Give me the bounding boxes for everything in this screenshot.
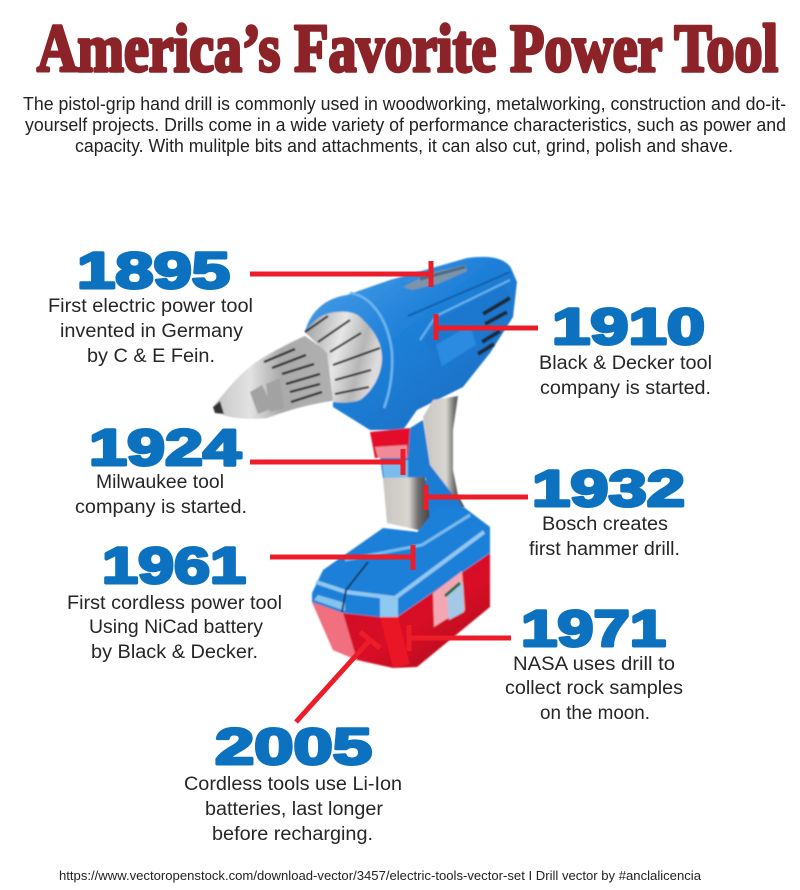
intro text: capacity. With mulitple bits and attachments, it can also cut, grind, polish and shave. [75,135,733,156]
callout: 2005: before recharging. [212,824,373,845]
callout: 1910 [539,298,712,399]
callout: 1895: invented in Germany [60,321,244,342]
callout: 1971: NASA uses drill to [513,654,675,675]
callout: 1932 [529,460,685,560]
callout: 1961 [67,537,282,663]
callout: 1895 [48,242,253,367]
callout: 1971: on the moon. [540,703,650,724]
callout: 1932: Bosch creates [542,514,668,535]
trigger [370,428,410,458]
callout: 1971: collect rock samples [505,678,683,699]
intro text: The pistol-grip hand drill is commonly used in woodworking, metalworking, construction and do-it- [23,93,786,114]
callout: 1961: by Black & Decker. [91,642,258,663]
callout: 1895: First electric power tool [48,296,253,317]
callout: 1932: 1932 [532,460,685,517]
collar highlight [350,293,392,408]
arrow: 1910 pointer [436,314,538,340]
blue drill housing [305,257,517,430]
callout: 1910: Black & Decker tool [539,353,712,374]
battery red base [312,553,490,668]
blue neck [380,420,490,545]
callout: 2005: batteries, last longer [205,799,384,820]
callout: 1924: company is started. [75,497,247,518]
metal cone [305,312,382,403]
callout: 1910: 1910 [552,298,705,355]
callout: 1924 [75,419,247,518]
arrow: 1932 pointer [426,485,528,510]
arrow: 1961 pointer [270,545,413,570]
battery highlights [316,532,484,598]
callout: 1961: First cordless power tool [67,593,282,614]
chuck nut detail [250,378,284,414]
arrow: 1971 pointer [409,625,511,651]
battery gauge [433,571,465,627]
arrow: 2005 pointer [296,632,380,722]
arrow: 1924 pointer [250,449,403,475]
arrow: 1895 pointer [250,261,431,287]
battery pink left face [312,602,357,660]
callout: 2005: 2005 [215,718,372,775]
cone grooves [305,316,380,394]
callout: 2005: Cordless tools use Li-Ion [184,774,402,795]
rear grip [423,396,465,508]
intro text: yourself projects. Drills come in a wide variety of performance characteristics, such as power and [25,114,786,135]
front grip [383,477,430,530]
footer credit: https://www.vectoropenstock.com/download-vector/3457/electric-tools-vector-set I Drill vector by #anclalicencia [59,869,701,883]
callout: 1932: first hammer drill. [529,539,680,560]
battery blue top [312,507,490,617]
callout: 1971: 1971 [521,600,666,657]
chuck grooves [264,349,322,402]
intro text [23,93,786,156]
callout: 1895: by C & E Fein. [87,346,215,367]
callout: 2005 [184,718,402,845]
chuck tip [213,401,224,414]
callout: 1895: 1895 [77,242,230,299]
callout: 1971 [505,600,683,724]
vent slots [478,298,510,354]
battery front corner [380,617,410,668]
icon: cordless drill illustration [213,257,517,668]
callout: 1924: Milwaukee tool [96,472,224,493]
callout: 1910: company is started. [540,378,711,399]
callout: 1961: 1961 [102,537,246,594]
housing lower side panel [424,285,510,368]
callout: 1924: 1924 [89,419,242,476]
drill chuck [213,336,336,419]
callout: 1961: Using NiCad battery [89,617,263,638]
housing top vent [403,265,467,290]
